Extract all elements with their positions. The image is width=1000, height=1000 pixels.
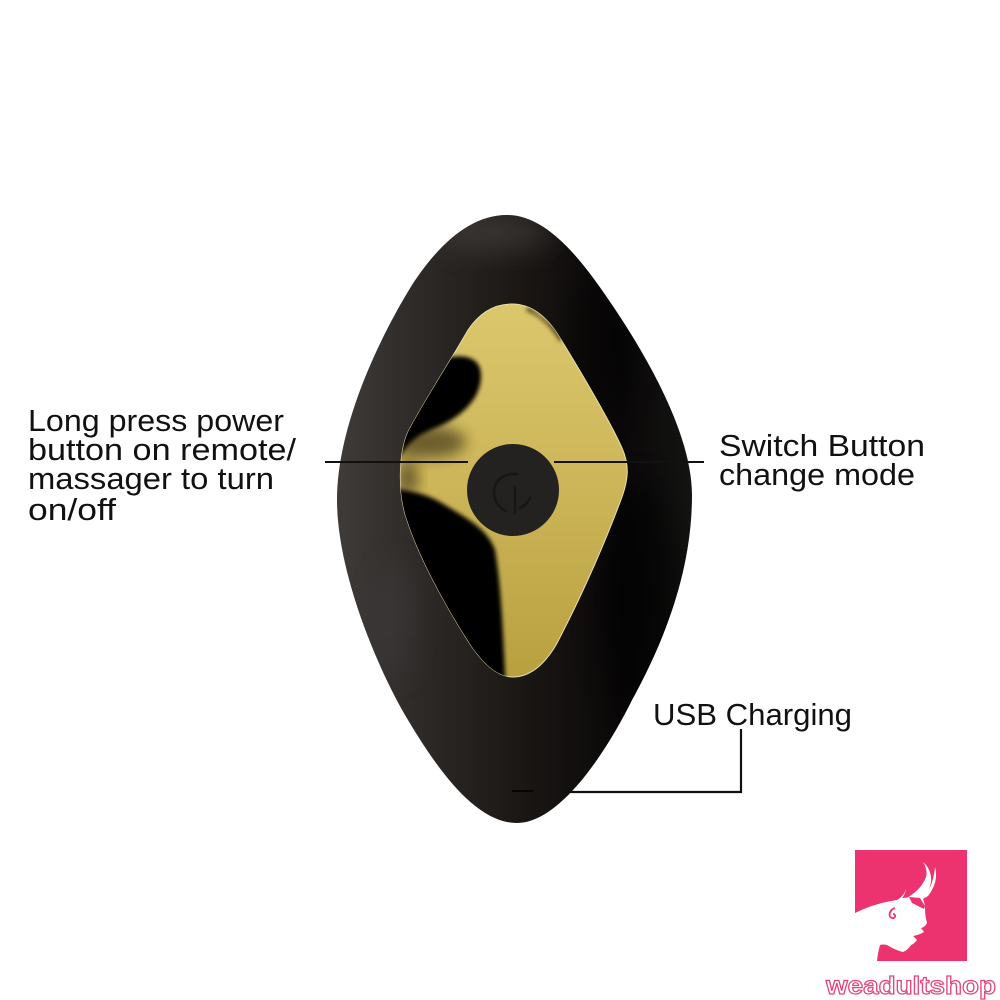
logo square <box>855 850 967 961</box>
callout text: power button instruction: Long press power <box>28 403 284 438</box>
massager shell <box>337 215 692 823</box>
icon: woman profile <box>855 862 936 961</box>
USB port slit <box>512 790 533 792</box>
top right glint <box>526 306 566 342</box>
callout text: power button instruction <box>28 403 296 527</box>
callout text: USB charging: USB Charging <box>653 697 852 732</box>
lower reflection <box>400 486 509 676</box>
mid-left dark shading <box>390 426 466 458</box>
product: massager body <box>337 212 692 823</box>
callout text: power button instruction: button on remote/ <box>28 432 296 467</box>
logo wordmark: weadultshop <box>825 972 996 1000</box>
upper reflection <box>392 356 481 460</box>
callout text: power button instruction: on/off <box>28 492 116 527</box>
callout text: switch button <box>719 428 925 492</box>
icon: power symbol <box>494 474 530 513</box>
infographic canvas <box>30 215 996 1000</box>
callout line: power and switch button <box>325 461 704 463</box>
logo: weadultshop <box>825 850 996 1000</box>
callout text: switch button: change mode <box>719 457 915 492</box>
callout text: switch button: Switch Button <box>719 428 925 463</box>
power button <box>467 444 559 536</box>
callout line: USB charging <box>570 729 741 792</box>
shell shading <box>375 212 680 720</box>
logo headband <box>909 897 925 909</box>
gold plate <box>390 304 627 690</box>
logo hair curl <box>890 908 895 918</box>
callout text: power button instruction: massager to turn <box>28 461 274 496</box>
